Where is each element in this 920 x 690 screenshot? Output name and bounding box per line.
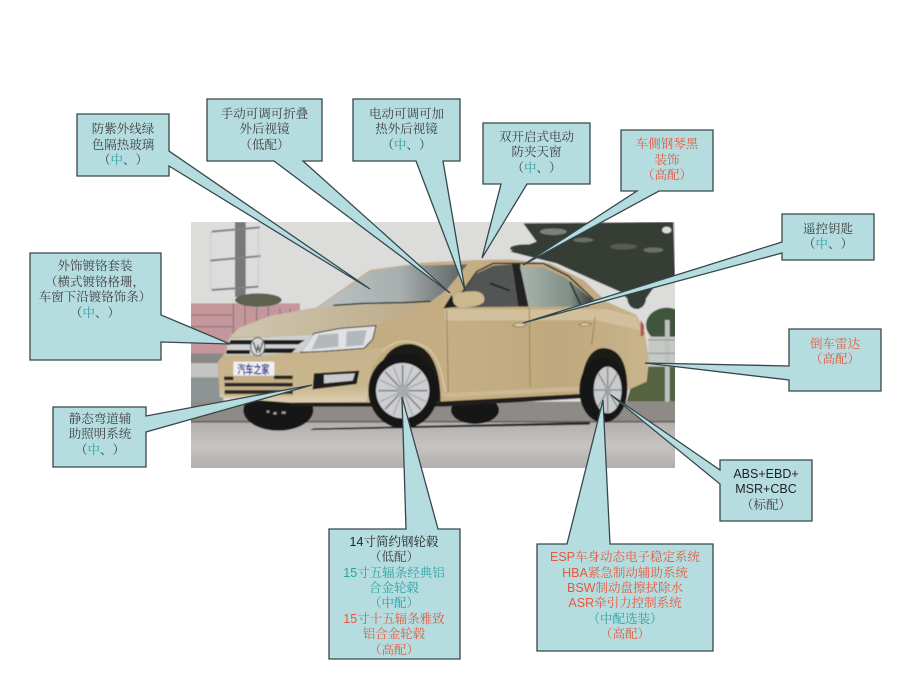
callout: reversing radar xyxy=(645,329,881,391)
tower xyxy=(210,222,282,307)
hood xyxy=(229,303,423,337)
licence plate xyxy=(232,361,275,376)
callout: UV glass xyxy=(77,114,370,289)
callout: cornering light: 静态弯道辅 xyxy=(69,411,131,426)
callout: sunroof: 防夹天窗 xyxy=(511,144,562,159)
body panel lines and handles xyxy=(442,307,644,397)
callout: reversing radar: （高配） xyxy=(810,351,860,366)
callout: sunroof xyxy=(482,123,590,258)
callout: manual mirror: （低配） xyxy=(239,138,290,152)
callout: heated mirror: 电动可调可加 xyxy=(369,106,444,121)
road and kerb xyxy=(190,402,677,469)
callout: heated mirror xyxy=(353,99,465,290)
side windows xyxy=(452,263,594,307)
callout: cornering light xyxy=(53,385,312,467)
callout: cornering light: 助照明系统 xyxy=(69,426,132,441)
callout: ESP xyxy=(537,400,713,651)
shoulder highlight xyxy=(445,309,640,330)
callout: ESP: BSW制动盘擦拭除水 xyxy=(567,580,683,595)
callout: ABS: （标配） xyxy=(741,497,791,512)
callout: wheels: 15寸五辐条经典铝 xyxy=(343,565,445,580)
car shadow xyxy=(310,422,590,430)
callout: ABS xyxy=(611,395,812,521)
callout: remote key: 遥控钥匙 xyxy=(803,221,853,236)
callout: remote key xyxy=(523,214,874,323)
callout: UV glass: 防紫外线绿 xyxy=(92,121,155,136)
callout: reversing radar: 倒车雷达 xyxy=(810,336,860,351)
body xyxy=(218,259,649,403)
callout: wheels: （高配） xyxy=(369,642,419,657)
callout: ESP: ASR牵引力控制系统 xyxy=(568,595,682,610)
callout: ABS: ABS+EBD+ xyxy=(733,467,799,481)
callout: ESP: （中配选装） xyxy=(587,611,663,626)
pink building and fence xyxy=(190,303,300,402)
callout: sunroof: 双开启式电动 xyxy=(499,129,574,144)
callout: chrome trim xyxy=(30,253,230,360)
callout: wheels: 14寸简约钢轮毂 xyxy=(350,534,439,549)
callout: heated mirror: （中、） xyxy=(381,137,432,152)
bumper xyxy=(219,348,385,403)
callout: ABS: MSR+CBC xyxy=(735,482,797,496)
callout: piano black trim xyxy=(523,130,713,265)
headlight xyxy=(301,326,376,352)
licence plate: 汽车之家 xyxy=(237,363,270,377)
callout: cornering light: （中、） xyxy=(75,442,125,457)
car photo xyxy=(190,220,687,470)
callout: chrome trim: （中、） xyxy=(70,305,120,320)
far wheels xyxy=(242,400,500,432)
wheel arches xyxy=(373,341,627,403)
tree xyxy=(510,222,675,309)
callout: sunroof: （中、） xyxy=(511,160,562,175)
underbody gap xyxy=(290,392,580,407)
callout: piano black trim: 车侧钢琴黑 xyxy=(636,137,699,151)
callout: wheels xyxy=(329,397,460,659)
callout: manual mirror: 外后视镜 xyxy=(239,121,290,136)
callout: manual mirror xyxy=(207,99,450,293)
callout: chrome trim: （横式镀铬格珊， xyxy=(45,274,145,289)
callout: wheels: 15寸十五辐条雅致 xyxy=(343,611,445,626)
callout: wheels: （中配） xyxy=(369,595,419,610)
front wheel xyxy=(368,353,438,428)
callout: manual mirror: 手动可调可折叠 xyxy=(221,106,309,121)
callout: UV glass: 色隔热玻璃 xyxy=(92,137,155,152)
lower grille xyxy=(224,376,293,396)
callout: ESP: ESP车身动态电子稳定系统 xyxy=(550,549,701,564)
callout: wheels: （低配） xyxy=(369,550,419,564)
callout: heated mirror: 热外后视镜 xyxy=(375,121,438,136)
grille and badge xyxy=(225,335,313,356)
rear wheel xyxy=(579,357,627,423)
callout: remote key: （中、） xyxy=(803,236,853,251)
callout: wheels: 铝合金轮毂 xyxy=(363,626,426,641)
callout: chrome trim: 车窗下沿镀铬饰条） xyxy=(39,289,151,304)
callout: chrome trim: 外饰镀铬套装 xyxy=(57,258,133,273)
mirror xyxy=(443,291,484,308)
callout: piano black trim: 装饰 xyxy=(654,152,680,167)
callout: wheels: 合金轮毂 xyxy=(369,580,419,595)
callout: ESP: （高配） xyxy=(600,626,650,641)
windscreen xyxy=(318,264,467,307)
background right xyxy=(626,307,675,402)
callout: piano black trim: （高配） xyxy=(642,167,692,182)
fog light xyxy=(313,371,359,389)
callout: UV glass: （中、） xyxy=(98,152,148,167)
callout: ESP: HBA紧急制动辅助系统 xyxy=(562,565,688,580)
